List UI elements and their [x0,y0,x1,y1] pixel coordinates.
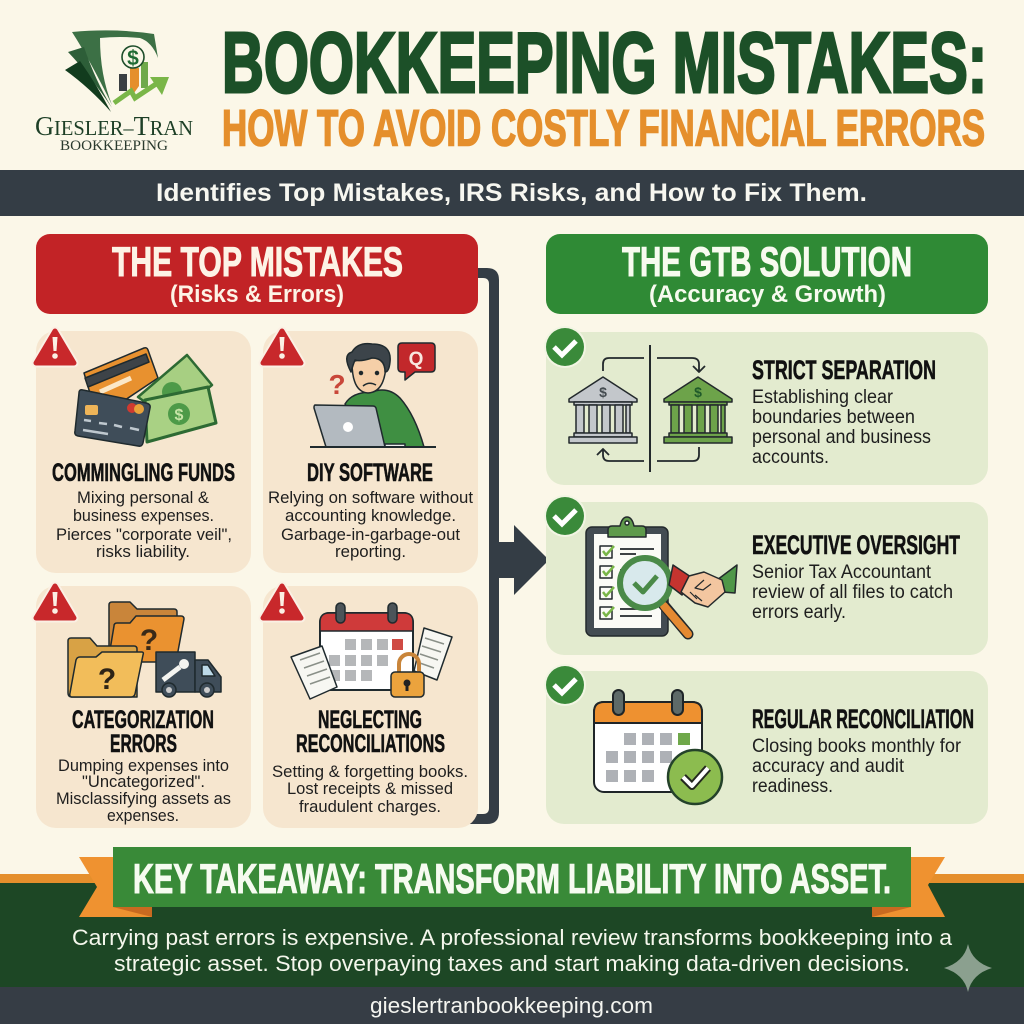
heading: the top mistakes [36,234,478,314]
card description: Setting & forgetting books. [272,762,468,781]
card description: Establishing clear [752,387,894,408]
card description: Dumping expenses into [58,756,229,775]
subtitle band [0,170,1024,216]
icon: calendar, receipts and padlock [291,603,452,699]
card description: "Uncategorized". [82,772,205,791]
heading: the GTB solution: (Accuracy & Growth) [649,281,886,308]
subtitle band: Identifies Top Mistakes, IRS Risks, and How to Fix Them. [156,179,867,207]
takeaway text: strategic asset. Stop overpaying taxes and start making data-driven decisions. [114,951,910,976]
logo: Giesler-Tran Bookkeeping [35,30,193,154]
footer bar [0,987,1024,1024]
card description: Pierces "corporate veil", [56,525,232,544]
card title: DIY SOFTWARE [307,459,433,487]
icon: credit cards and cash: $ [175,407,184,424]
card description [752,562,953,623]
icon: separated banks: $ [599,384,607,400]
card title: STRICT SEPARATION [752,355,936,385]
ribbon banner: key takeaway [79,847,945,917]
card description: Garbage-in-garbage-out [281,525,460,544]
card description: fraudulent charges. [299,797,441,816]
panel: DIY software [263,331,478,573]
icon: confused person at laptop: ? [328,369,346,400]
logo: Giesler-Tran Bookkeeping: BOOKKEEPING [60,138,168,154]
panel: neglecting reconciliations [263,586,478,828]
card description: expenses. [107,806,179,825]
icon: warning triangle [36,331,74,363]
card description [752,736,962,797]
panel: regular reconciliation [544,664,988,824]
card title: RECONCILIATIONS [296,730,445,758]
takeaway text: Carrying past errors is expensive. A professional review transforms bookkeeping into a [72,925,953,950]
panel: commingling funds [36,331,251,573]
icon: credit cards and cash [75,348,216,446]
card description: Mixing personal & [77,488,210,507]
icon: separated banks: $ [694,384,702,400]
icon: folders and truck [68,602,221,697]
icon: sparkle [944,944,992,992]
icon: confused person at laptop [310,343,436,447]
card description [56,488,232,561]
card description: risks liability. [96,542,190,561]
icon: warning triangle [263,586,301,618]
logo: Giesler-Tran Bookkeeping: GIESLER–TRAN [35,111,193,141]
card description: personal and business [752,427,931,448]
panel: executive oversight [544,495,988,655]
card title: CATEGORIZATION [72,706,214,734]
card description: Senior Tax Accountant [752,562,932,583]
card description: accounting knowledge. [285,506,456,525]
card title [296,706,445,758]
icon: check badge [544,495,586,537]
card description [56,756,231,825]
card title: ERRORS [110,730,177,758]
card description [272,762,468,816]
card description: reporting. [335,542,406,561]
card description: accounts. [752,447,829,468]
takeaway text [72,925,953,976]
card description: boundaries between [752,407,915,428]
title [222,16,987,156]
icon: folders and truck: ? [140,624,158,657]
card description [268,488,473,561]
icon: calendar with check [594,690,722,804]
footer bar: gieslertranbookkeeping.com [370,993,653,1018]
heading: the GTB solution: THE GTB SOLUTION [622,238,912,285]
card description: Misclassifying assets as [56,789,231,808]
footer panel: takeaway background [0,874,1024,987]
heading: the GTB solution [546,234,988,314]
icon: check badge [544,664,586,706]
card description: business expenses. [73,506,214,525]
card title: NEGLECTING [318,706,422,734]
panel: categorization errors [36,586,251,828]
card description: Lost receipts & missed [287,779,453,798]
icon: folders and truck: ? [98,663,116,696]
icon: check badge [544,326,586,368]
card description: review of all files to catch [752,582,953,603]
card description: readiness. [752,776,833,797]
panel: strict separation [544,326,988,485]
icon: confused person at laptop: Q [409,349,423,370]
logo: Giesler-Tran Bookkeeping: $ [127,47,139,70]
card title [72,706,214,758]
icon: warning triangle [36,586,74,618]
heading: the top mistakes: THE TOP MISTAKES [112,238,403,285]
icon: clipboard, magnifier and handshake [586,517,737,636]
card description: Closing books monthly for [752,736,962,757]
heading: the top mistakes: (Risks & Errors) [170,281,344,308]
connector arrow from mistakes to solution [468,268,549,824]
card description: errors early. [752,602,846,623]
card description: Relying on software without [268,488,473,507]
card title: COMMINGLING FUNDS [52,459,235,487]
icon: warning triangle [263,331,301,363]
card description: accuracy and audit [752,756,905,777]
card description [752,387,931,468]
icon: separated banks [569,345,732,472]
